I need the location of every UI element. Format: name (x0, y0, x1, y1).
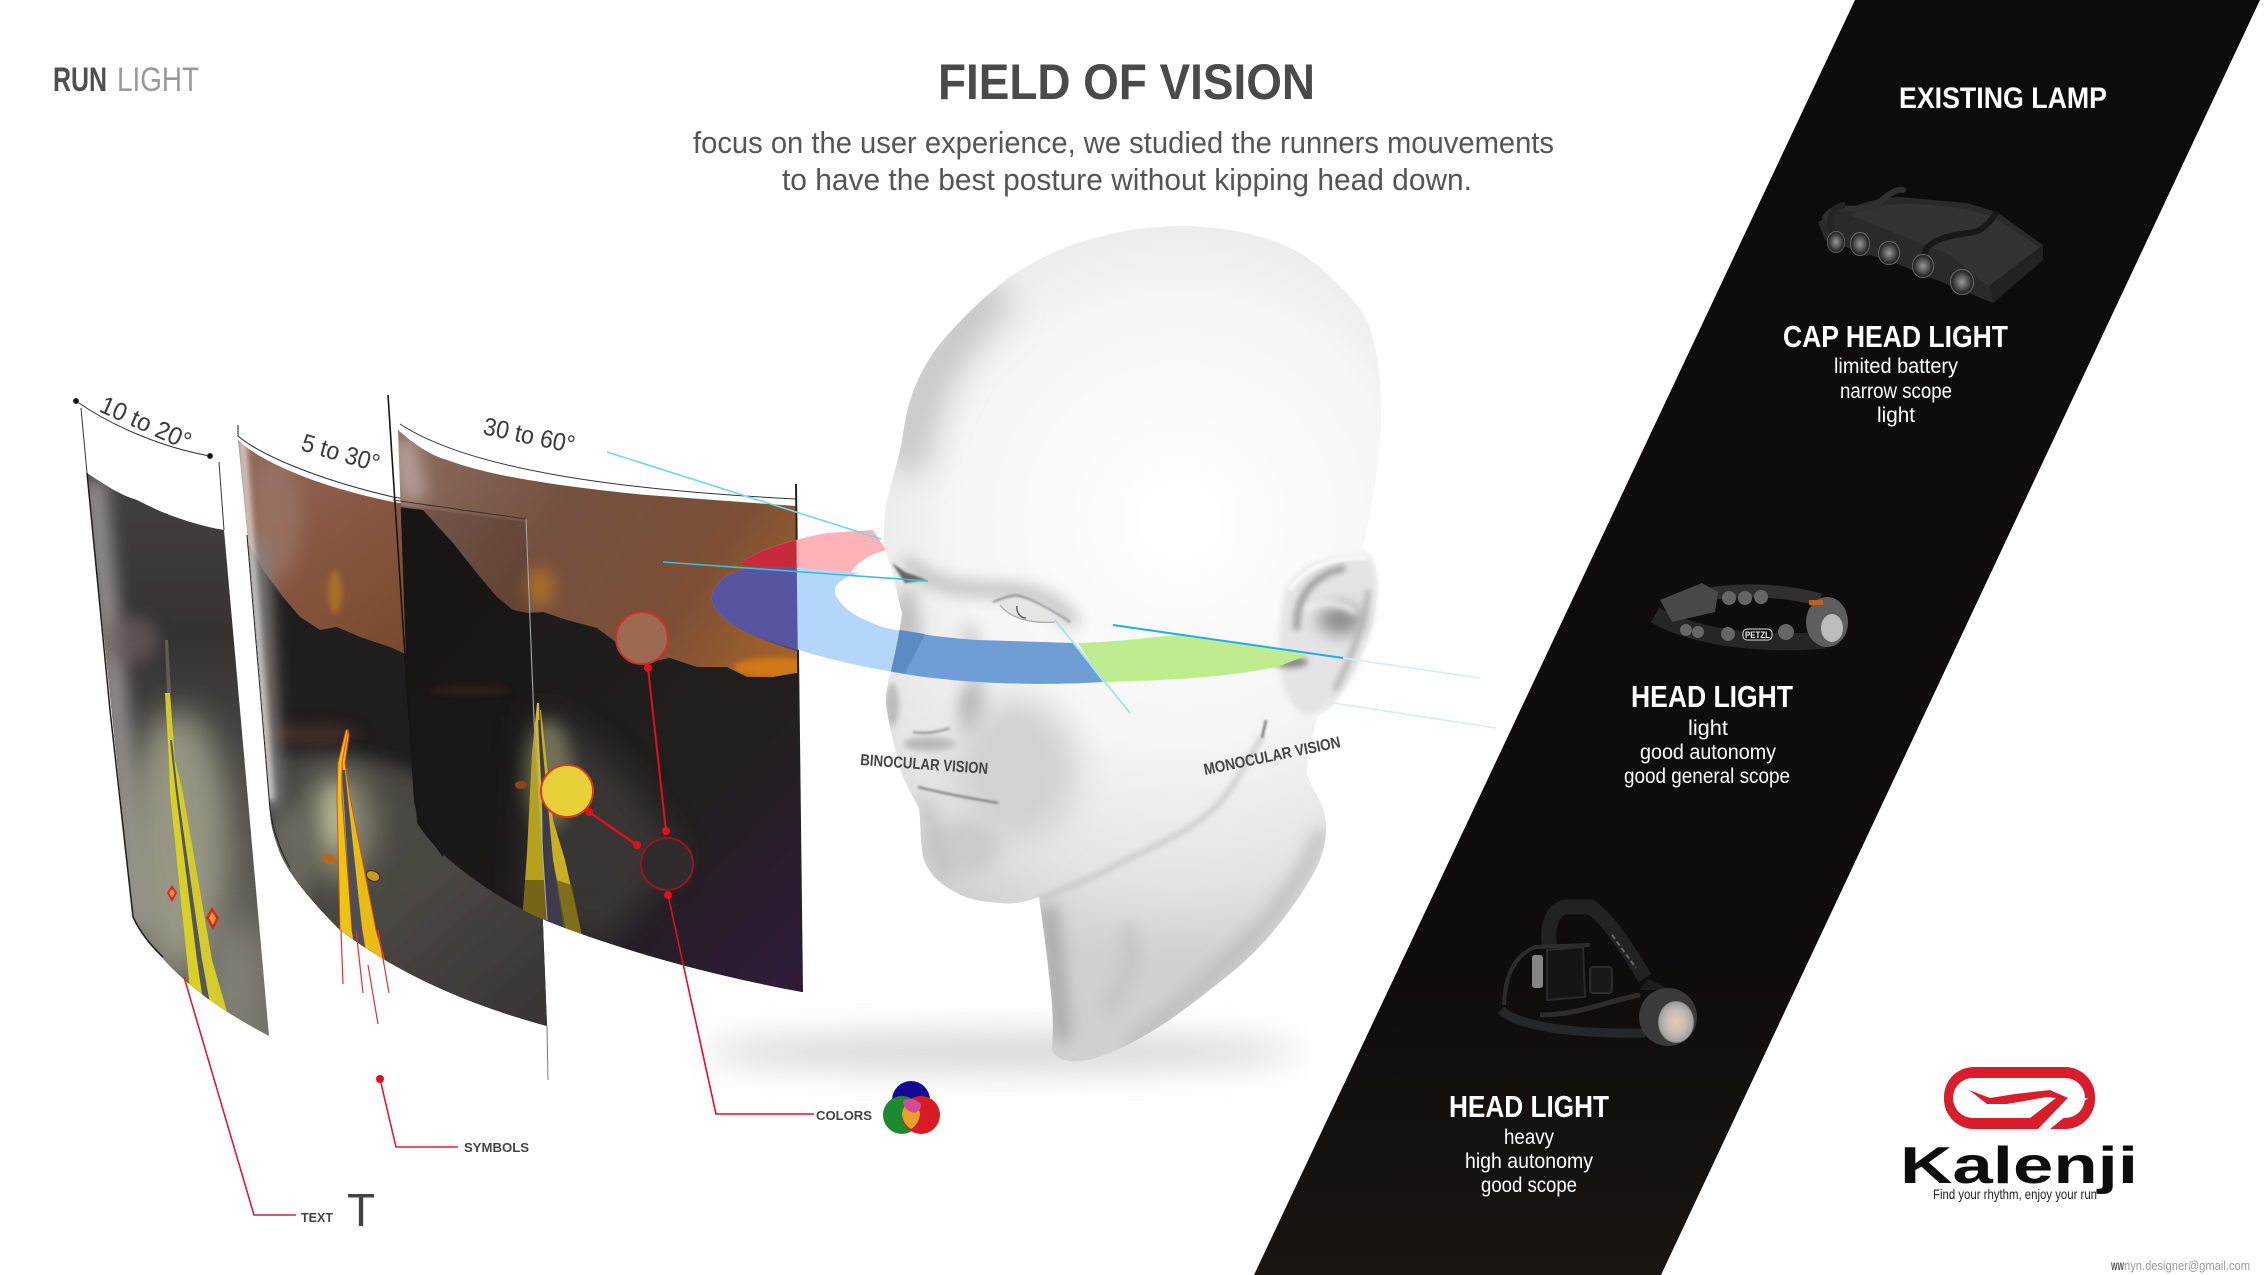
Kalenji brand logo: Find your rhythm, enjoy your run (1933, 1186, 2097, 1202)
lamp image: petzl head light: PETZL (1745, 630, 1770, 640)
road view panel: 5 to 30 degrees (230, 425, 560, 1080)
green monocular field segment (1078, 635, 1307, 682)
caption: head light, heavy: high autonomy (1465, 1150, 1593, 1173)
blue field over the face (890, 630, 1103, 684)
logo title: RUN LIGHT: RUN (53, 61, 107, 99)
band heading: existing lamp: EXISTING LAMP (1899, 82, 2107, 115)
caption: cap head light: narrow scope (1840, 380, 1952, 403)
red upper field segment (741, 530, 886, 574)
subtitle text block (693, 125, 1554, 197)
caption: head light, heavy (1449, 1089, 1609, 1197)
red symbol leader lines from middle panel (341, 930, 389, 1024)
caption: head light, light: HEAD LIGHT (1631, 679, 1793, 714)
caption: head light, heavy: good scope (1481, 1174, 1577, 1197)
angle label: 5 to 30: 5 to 30° (298, 429, 383, 478)
subtitle text block: focus on the user experience, we studied the runners mouvements (693, 125, 1554, 160)
label: monocular vision: MONOCULAR VISION (1202, 734, 1342, 779)
caption: cap head light (1783, 319, 2008, 427)
angle label: 10 to 20: 10 to 20° (96, 391, 196, 456)
vision disc: binocular and monocular fields (712, 530, 1307, 684)
Kalenji brand logo (1900, 1067, 2138, 1202)
caption: head light, light (1624, 679, 1793, 788)
caption: head light, heavy: HEAD LIGHT (1449, 1089, 1609, 1124)
callout: colors: COLORS (816, 1108, 872, 1123)
callout: symbols: SYMBOLS (464, 1140, 529, 1155)
label: binocular vision: BINOCULAR VISION (860, 752, 989, 778)
blue binocular field ring (712, 568, 1103, 684)
blue and red fields over the road panel (712, 540, 798, 652)
angle label: 30 to 60: 30 to 60° (481, 412, 578, 459)
lamp image: petzl head light (1655, 583, 1848, 647)
caption: head light, light: good autonomy (1640, 741, 1776, 764)
colour circle markers and connectors (541, 612, 814, 1114)
logo title: RUN LIGHT: LIGHT (117, 61, 199, 99)
caption: cap head light: limited battery (1834, 355, 1958, 378)
head floor shadow (700, 1032, 1300, 1072)
3D head model (884, 226, 1381, 1061)
designer email credit: nyn.designer@gmail.com (2124, 1258, 2250, 1273)
ear (1272, 556, 1377, 715)
caption: head light, light: good general scope (1624, 765, 1790, 788)
cyan sight lines (607, 452, 1496, 728)
logo title: RUN LIGHT (53, 61, 199, 99)
caption: cap head light: CAP HEAD LIGHT (1783, 319, 2008, 354)
subtitle text block: to have the best posture without kipping head down. (782, 162, 1472, 197)
road view panel: 10 to 20 degrees (80, 465, 275, 1040)
caption: head light, heavy: heavy (1504, 1126, 1554, 1149)
black diagonal band: existing lamps (1254, 0, 2260, 1275)
main heading: FIELD OF VISION (938, 54, 1315, 110)
callout: text (184, 977, 375, 1236)
callout: text: TEXT (301, 1210, 333, 1225)
callout: text: T (347, 1184, 375, 1236)
panel 1 angle bracket (74, 398, 224, 530)
callout: colors (816, 1081, 940, 1134)
callout: symbols (376, 1075, 529, 1155)
lamp image: cap head light (1818, 190, 2043, 303)
Kalenji brand logo: Kalenji (1900, 1137, 2138, 1195)
road view panel: 30 to 60 degrees (380, 395, 820, 1010)
designer email credit: WW (2111, 1261, 2124, 1273)
caption: head light, light: light (1688, 717, 1728, 740)
lamp image: high-autonomy head light (1501, 907, 1697, 1046)
caption: cap head light: light (1877, 404, 1915, 427)
